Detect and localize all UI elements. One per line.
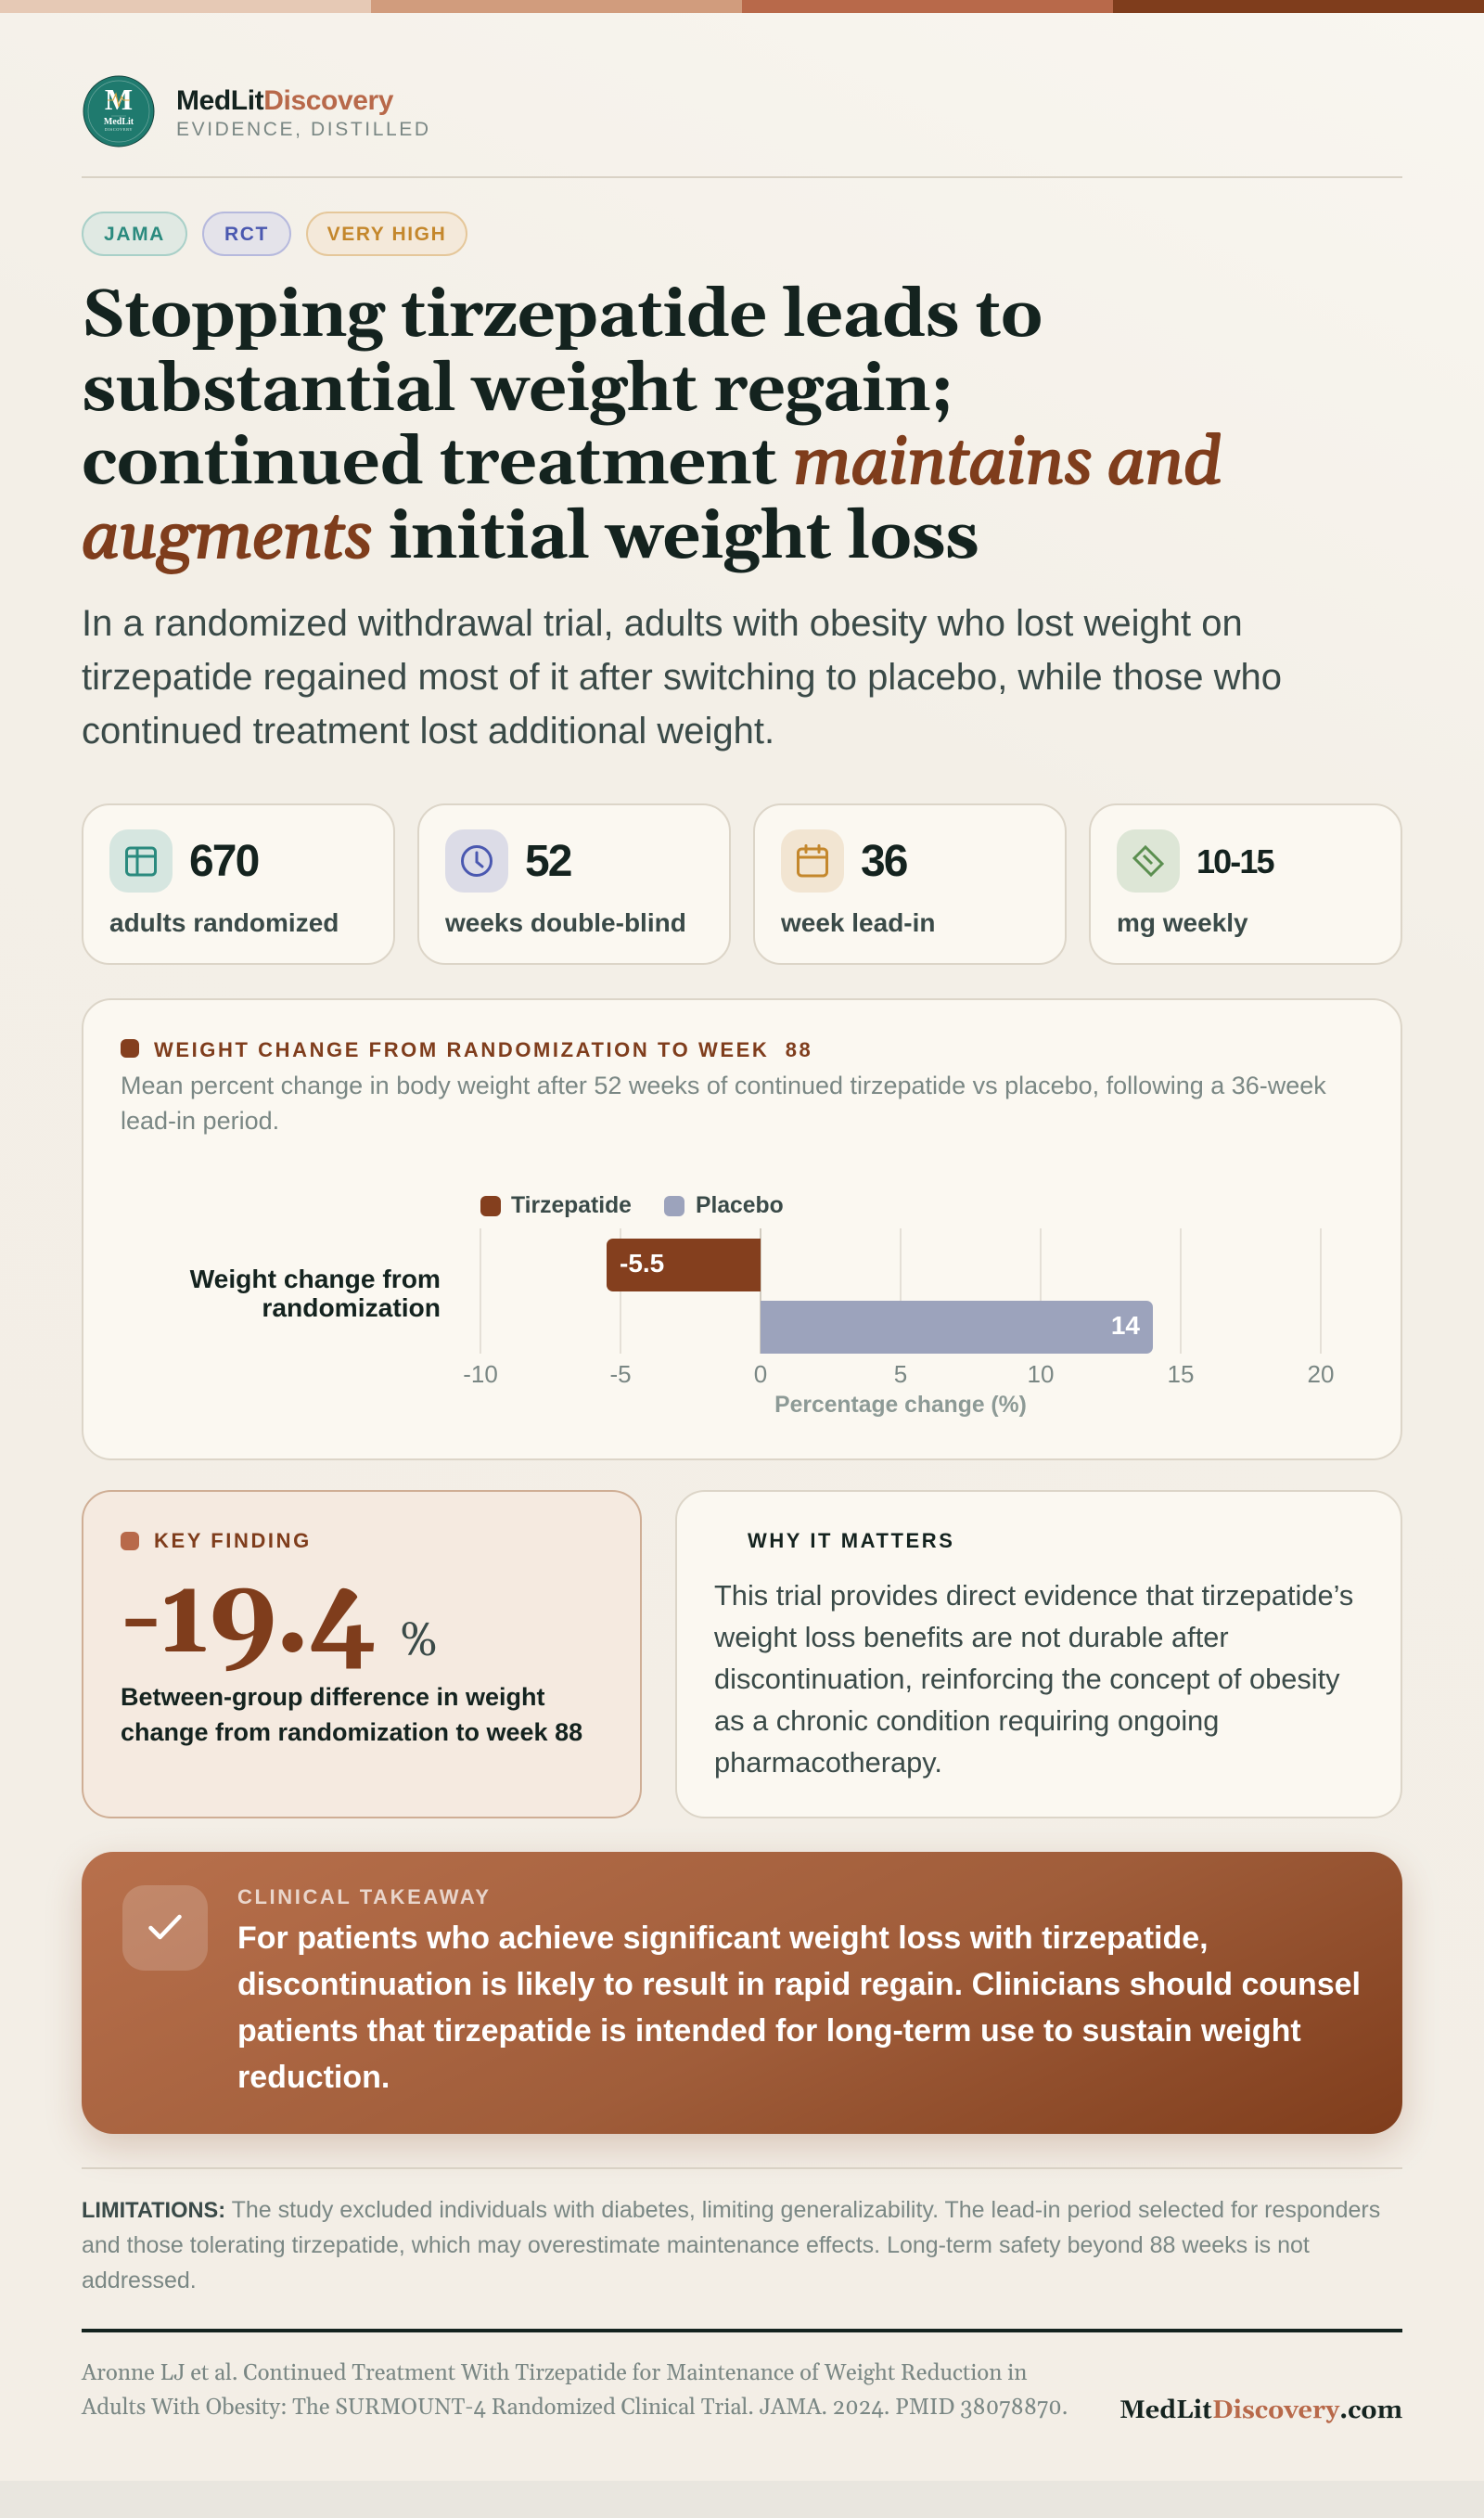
bar: tirzepatide -5.5: -5.5 (620, 1249, 664, 1278)
stat label: week lead-in (781, 908, 936, 937)
chip: RCT: RCT (224, 224, 269, 245)
panel: weight change chart (82, 998, 1402, 1460)
stat card: week lead-in (753, 803, 1067, 965)
icon: MedLit logo (83, 76, 154, 147)
x axis ticks (463, 1360, 1334, 1388)
chart heading marker (121, 1039, 139, 1058)
stat card: adults randomized (82, 803, 395, 965)
takeaway text: discontinuation is likely to result in rapid regain. Clinicians should counsel (237, 1967, 1361, 2002)
chart description: lead-in period. (121, 1107, 279, 1135)
big number: -19.4 (121, 1551, 374, 1689)
panel: clinical takeaway (82, 1852, 1402, 2134)
x axis title: Percentage change (%) (774, 1393, 1027, 1418)
stat value: 52 (525, 837, 571, 886)
why it matters body: as a chronic condition requiring ongoing (714, 1704, 1219, 1737)
stat label: weeks double-blind (445, 908, 686, 937)
chip: VERY HIGH: VERY HIGH (327, 224, 446, 245)
limitations text: LIMITATIONS: The study excluded individuals with diabetes, limiting generalizability. The lead-in period selected for responders (82, 2197, 1380, 2223)
title: Stopping tirzepatide leads to (82, 274, 1043, 359)
limitations text: addressed. (82, 2267, 197, 2293)
subtitle (82, 603, 1282, 752)
key finding marker (121, 1532, 139, 1550)
takeaway label: CLINICAL TAKEAWAY (237, 1885, 492, 1908)
x axis ticks: -10 (463, 1360, 498, 1388)
why it matters body: This trial provides direct evidence that tirzepatide’s (714, 1579, 1353, 1612)
limitations text (82, 2197, 1380, 2293)
why it matters body: pharmacotherapy. (714, 1746, 942, 1779)
legend: Tirzepatide (511, 1193, 632, 1218)
key finding label: KEY FINDING (154, 1529, 312, 1552)
legend (480, 1193, 784, 1218)
chip: RCT (202, 212, 291, 256)
x axis ticks: 0 (754, 1360, 767, 1388)
icon: table (109, 829, 173, 893)
citation: Adults With Obesity: The SURMOUNT-4 Randomized Clinical Trial. JAMA. 2024. PMID 38078870. (82, 2394, 1068, 2422)
top colour bar (0, 0, 1484, 13)
takeaway text: patients that tirzepatide is intended for long-term use to sustain weight (237, 2013, 1301, 2049)
citation (82, 2360, 1068, 2422)
key finding description: Between-group difference in weight (121, 1683, 545, 1711)
title: substantial weight regain; (82, 348, 953, 433)
why it matters body: discontinuation, reinforcing the concept of obesity (714, 1663, 1340, 1695)
bar: placebo 14 (761, 1301, 1153, 1354)
bar: tirzepatide -5.5 (607, 1239, 761, 1291)
key finding description: change from randomization to week 88 (121, 1718, 582, 1746)
title: augments initial weight loss (82, 495, 979, 581)
stat card: weeks double-blind (417, 803, 731, 965)
subtitle: In a randomized withdrawal trial, adults with obesity who lost weight on (82, 603, 1243, 644)
row label: randomization (262, 1292, 441, 1322)
why it matters body (714, 1579, 1353, 1779)
subtitle: continued treatment lost additional weight. (82, 711, 774, 752)
brand tagline: EVIDENCE, DISTILLED (176, 119, 431, 140)
brand name: MedLitDiscovery (176, 85, 393, 115)
takeaway text (237, 1921, 1361, 2095)
chart heading: WEIGHT CHANGE FROM RANDOMIZATION TO WEEK 88 (154, 1038, 812, 1061)
x axis ticks: 15 (1168, 1360, 1194, 1388)
title (82, 274, 1222, 581)
icon: MedLit logo: MedLit (104, 117, 134, 127)
why it matters body: weight loss benefits are not durable after (714, 1621, 1229, 1653)
title: continued treatment maintains and (82, 421, 1222, 507)
bar chart (189, 1193, 1334, 1418)
chip: JAMA: JAMA (104, 224, 165, 245)
icon: check (122, 1885, 208, 1971)
stat value: 670 (189, 837, 258, 886)
why it matters label: WHY IT MATTERS (748, 1529, 955, 1552)
stat card: mg weekly (1089, 803, 1402, 965)
header divider (82, 176, 1402, 178)
bar: placebo 14: 14 (1111, 1311, 1140, 1340)
citation: Aronne LJ et al. Continued Treatment With Tirzepatide for Maintenance of Weight Reduction in (82, 2360, 1027, 2388)
chip: VERY HIGH (306, 212, 467, 256)
limitations text: and those tolerating tirzepatide, which may overestimate maintenance effects. Long-term safety beyond 88 weeks is not (82, 2232, 1310, 2258)
chart description (121, 1072, 1326, 1135)
limitations divider (82, 2167, 1402, 2169)
chip: JAMA (82, 212, 187, 256)
percent sign: % (400, 1613, 438, 1672)
subtitle: tirzepatide regained most of it after switching to placebo, while those who (82, 657, 1282, 698)
footer brand: MedLitDiscovery.com (1119, 2396, 1402, 2427)
footer rule (82, 2329, 1402, 2332)
icon: clock (445, 829, 508, 893)
panel: why it matters (675, 1490, 1402, 1818)
stat value: 36 (861, 837, 907, 886)
icon: pill tag (1117, 829, 1180, 893)
chart description: Mean percent change in body weight after 52 weeks of continued tirzepatide vs placebo, following a 36-week (121, 1072, 1326, 1099)
key finding description (121, 1683, 582, 1746)
stat value: 10-15 (1196, 842, 1273, 880)
takeaway text: reduction. (237, 2060, 390, 2095)
x axis ticks: 20 (1308, 1360, 1334, 1388)
stat label: adults randomized (109, 908, 339, 937)
x axis ticks: 10 (1028, 1360, 1054, 1388)
panel: key finding (82, 1490, 642, 1818)
stat label: mg weekly (1117, 908, 1248, 937)
x axis ticks: 5 (894, 1360, 907, 1388)
x axis ticks: -5 (609, 1360, 632, 1388)
takeaway text: For patients who achieve significant weight loss with tirzepatide, (237, 1921, 1209, 1956)
legend: Placebo (696, 1193, 784, 1218)
icon: MedLit logo: M (105, 83, 133, 116)
icon: calendar (781, 829, 844, 893)
row label: Weight change from (190, 1264, 441, 1293)
icon: MedLit logo: DISCOVERY (105, 127, 133, 132)
